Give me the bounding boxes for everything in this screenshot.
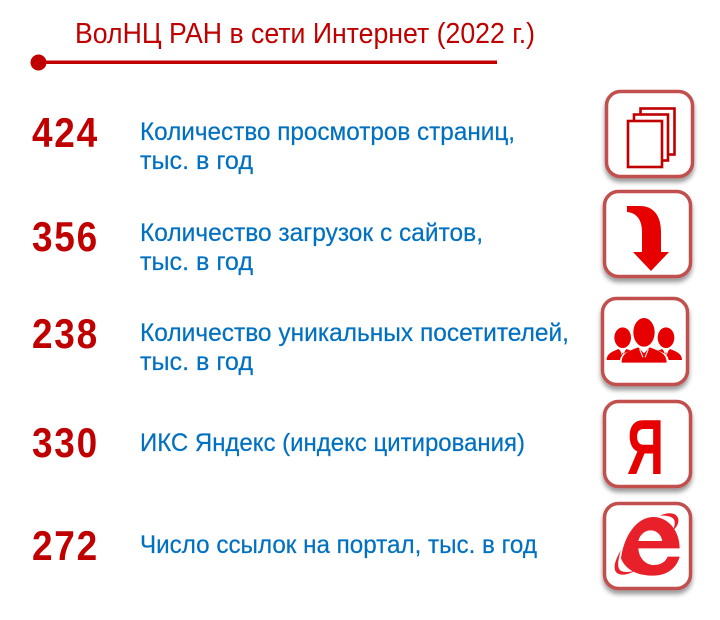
icon: pages [606,92,692,176]
icon: Yandex letter [604,402,690,491]
icon: Yandex letter: Я [627,403,664,491]
label: page views [140,118,515,175]
label: portal links: Число ссылок на портал, тыс. в год [140,531,537,559]
row 5: portal links [32,504,690,588]
icon: browser logo [604,504,690,588]
value: 356: 356 [32,214,99,261]
label: page views: Количество просмотров страниц, [140,118,515,146]
label: unique visitors [140,319,569,376]
value: 272: 272 [32,523,99,570]
title underline with dot [30,54,497,70]
icon: group of people [602,298,688,384]
label: downloads [140,219,483,276]
title: ВолНЦ РАН в сети Интернет (2022 г.) [75,18,535,50]
row 2: downloads [32,192,690,276]
row 4: Yandex index [32,402,690,491]
label: unique visitors: Количество уникальных посетителей, [140,319,569,347]
icon: curved down arrow [604,192,690,276]
value: 424: 424 [32,110,99,157]
label: unique visitors: тыс. в год [140,348,253,376]
label: page views: тыс. в год [140,147,253,175]
row 1: page views [32,92,692,176]
label: downloads: Количество загрузок с сайтов, [140,219,483,247]
label: Yandex citation index: ИКС Яндекс (индекс цитирования) [140,429,525,457]
value: 238: 238 [32,311,99,358]
label: downloads: тыс. в год [140,248,253,276]
value: 330: 330 [32,420,99,467]
row 3: unique visitors [32,298,688,384]
